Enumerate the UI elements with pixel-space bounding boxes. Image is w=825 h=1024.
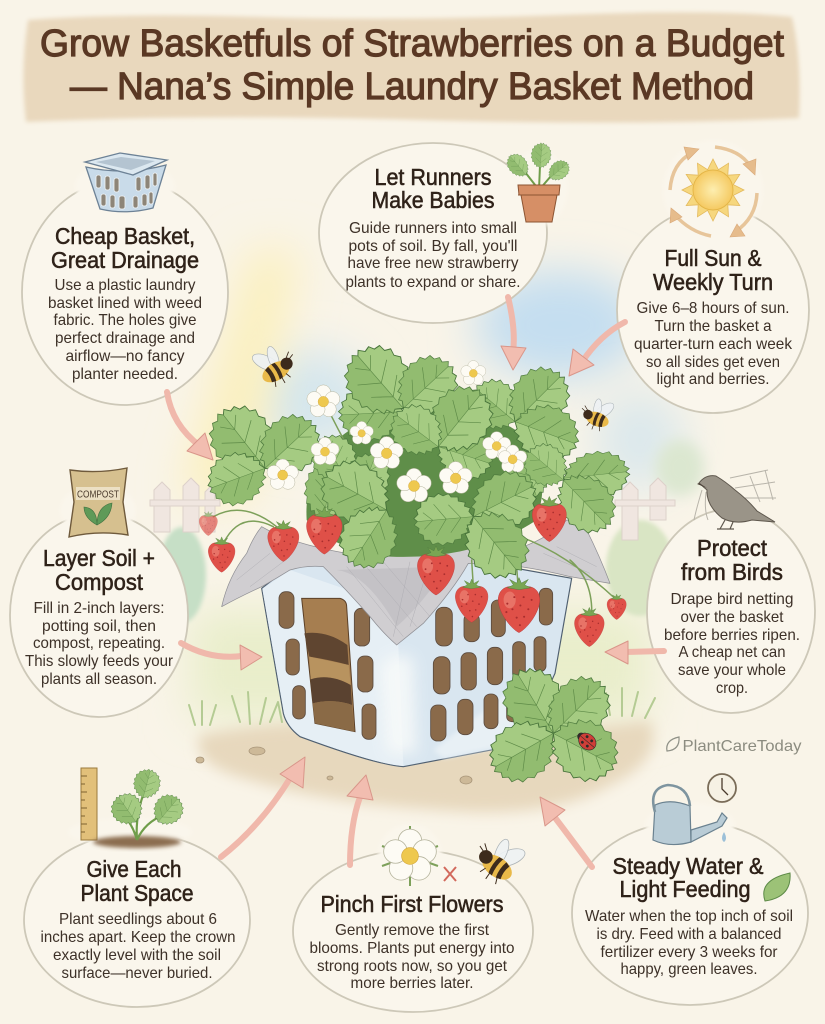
- body text: airflow—no fancy: [66, 348, 184, 365]
- body text: before berries ripen.: [664, 627, 800, 644]
- panel: soil and compost: [10, 468, 188, 717]
- body text: Guide runners into small: [349, 220, 517, 237]
- icon: red x: [444, 867, 456, 881]
- watermark: PlantCareToday: PlantCareToday: [682, 738, 802, 755]
- panel: full sun: [617, 140, 809, 413]
- heading: Compost: [55, 569, 144, 595]
- body text: [585, 908, 793, 978]
- icon: bee: [466, 826, 532, 892]
- body text: [346, 220, 520, 291]
- panel: water and feeding: [572, 774, 808, 1005]
- panel: protect from birds: [647, 470, 815, 713]
- corner leaf cluster: [478, 656, 629, 793]
- upper flowers: [267, 361, 527, 489]
- panel: pinch first flowers: [293, 824, 533, 1012]
- arrow: pinch to basket: [347, 775, 373, 865]
- arrow: water to basket: [540, 797, 592, 867]
- body text: strong roots now, so you get: [317, 958, 508, 975]
- body text: Water when the top inch of soil: [585, 908, 793, 925]
- arrow: birds to plant: [605, 641, 664, 664]
- basket body: [262, 560, 572, 767]
- body text: light and berries.: [656, 371, 770, 388]
- heading: Cheap Basket,: [55, 223, 195, 249]
- heading: [43, 545, 155, 595]
- icon: ladybug: [573, 728, 599, 754]
- heading: Great Drainage: [51, 247, 199, 273]
- heading: Give Each: [86, 856, 182, 882]
- heading: [612, 853, 764, 902]
- body text: more berries later.: [350, 975, 474, 992]
- heading: [653, 245, 773, 295]
- body text: [25, 600, 174, 688]
- body text: Use a plastic laundry: [54, 277, 196, 294]
- distant bushes: [158, 440, 704, 623]
- panel: cheap basket: [22, 153, 228, 405]
- icon: sun with turning arrows: [670, 147, 757, 237]
- heading: Light Feeding: [620, 876, 750, 902]
- heading: Make Babies: [372, 187, 494, 213]
- body text: blooms. Plants put energy into: [310, 940, 515, 957]
- body text: over the basket: [680, 609, 784, 626]
- body text: Fill in 2-inch layers:: [34, 600, 164, 617]
- heading: Full Sun &: [664, 245, 762, 271]
- body text: compost, repeating.: [33, 635, 165, 652]
- watercolor background scene: [150, 250, 704, 812]
- arrow: sun to plant: [569, 322, 625, 376]
- heading: Pinch First Flowers: [320, 891, 504, 917]
- body text: Gently remove the first: [335, 922, 490, 939]
- body text: A cheap net can: [678, 644, 786, 661]
- body text: [634, 300, 793, 388]
- heading: [80, 856, 194, 906]
- title text: [40, 23, 784, 108]
- panel: plant space: [24, 766, 250, 1007]
- icon: compost bag: [69, 468, 128, 537]
- arrow: spacing to basket: [221, 757, 305, 857]
- front leaves: [309, 449, 547, 591]
- body text: planter needed.: [72, 366, 178, 383]
- body text: save your whole: [678, 662, 786, 679]
- icon: potted seedling: [503, 142, 573, 222]
- central illustration: strawberry laundry basket: [197, 332, 632, 793]
- body text: happy, green leaves.: [620, 961, 758, 978]
- arrow: soil to basket: [181, 643, 262, 670]
- heading: Weekly Turn: [653, 269, 773, 295]
- heading: Protect: [697, 535, 768, 561]
- body text: pots of soil. By fall, you'll: [348, 238, 518, 255]
- ground soil: [199, 720, 653, 812]
- soil window: [302, 598, 355, 732]
- heading: Let Runners: [374, 164, 492, 190]
- body text: [664, 591, 800, 697]
- heading: [372, 164, 494, 213]
- body text: plants all season.: [41, 671, 157, 688]
- body text: Turn the basket a: [654, 318, 772, 335]
- body text: Give 6–8 hours of sun.: [636, 300, 790, 317]
- heading: Layer Soil +: [43, 545, 155, 571]
- body text: basket lined with weed: [48, 295, 202, 312]
- body text: quarter-turn each week: [634, 336, 793, 353]
- arrow: runners to plant: [501, 297, 526, 370]
- icon: bee left: [246, 335, 303, 393]
- panel: runners: [319, 142, 573, 323]
- body text: is dry. Feed with a balanced: [596, 926, 782, 943]
- icon: ruler and seedling: [81, 766, 189, 848]
- heading: from Birds: [681, 559, 783, 585]
- body text: potting soil, then: [42, 618, 156, 635]
- body text: Drape bird netting: [670, 591, 794, 608]
- strawberries: [199, 496, 626, 647]
- icon: compost bag: COMPOST: [77, 488, 119, 500]
- pebbles: [196, 747, 472, 784]
- basket holes: [279, 588, 553, 741]
- icon: bee right: [576, 392, 618, 435]
- foliage shade: [306, 409, 543, 557]
- body text: This slowly feeds your: [25, 653, 174, 670]
- grass: [189, 688, 655, 725]
- body text: inches apart. Keep the crown: [40, 929, 236, 946]
- body text: fertilizer every 3 weeks for: [600, 944, 778, 961]
- icon: laundry basket: [85, 153, 167, 212]
- title text: Grow Basketfuls of Strawberries on a Budget: [40, 23, 784, 65]
- heading: Steady Water &: [612, 853, 764, 879]
- title text: — Nana’s Simple Laundry Basket Method: [70, 66, 754, 108]
- strawberry leaves: [197, 332, 632, 545]
- body text: [40, 911, 236, 982]
- body text: Plant seedlings about 6: [59, 911, 217, 928]
- fences: [150, 478, 675, 540]
- body text: plants to expand or share.: [346, 274, 520, 291]
- body text: so all sides get even: [646, 354, 780, 371]
- icon: watering can and clock: [653, 774, 736, 845]
- runners and stems: [213, 413, 617, 617]
- body text: fabric. The holes give: [54, 312, 197, 329]
- gray cloth lining: [222, 520, 610, 645]
- icon: bird and netting: [694, 470, 776, 529]
- body text: [48, 277, 202, 383]
- icon: flower: [382, 826, 438, 886]
- body text: exactly level with the soil: [53, 947, 221, 964]
- body text: [310, 922, 515, 992]
- front flowers: [397, 462, 472, 502]
- heading: [681, 535, 783, 585]
- body text: have free new strawberry: [348, 255, 518, 272]
- heading: [51, 223, 199, 273]
- arrow: basket to plant: [167, 392, 213, 460]
- heading: Plant Space: [80, 880, 194, 906]
- icon: leaf: [764, 873, 790, 901]
- body text: crop.: [716, 680, 748, 697]
- body text: perfect drainage and: [55, 330, 195, 347]
- body text: surface—never buried.: [62, 965, 212, 982]
- title banner: [23, 12, 800, 123]
